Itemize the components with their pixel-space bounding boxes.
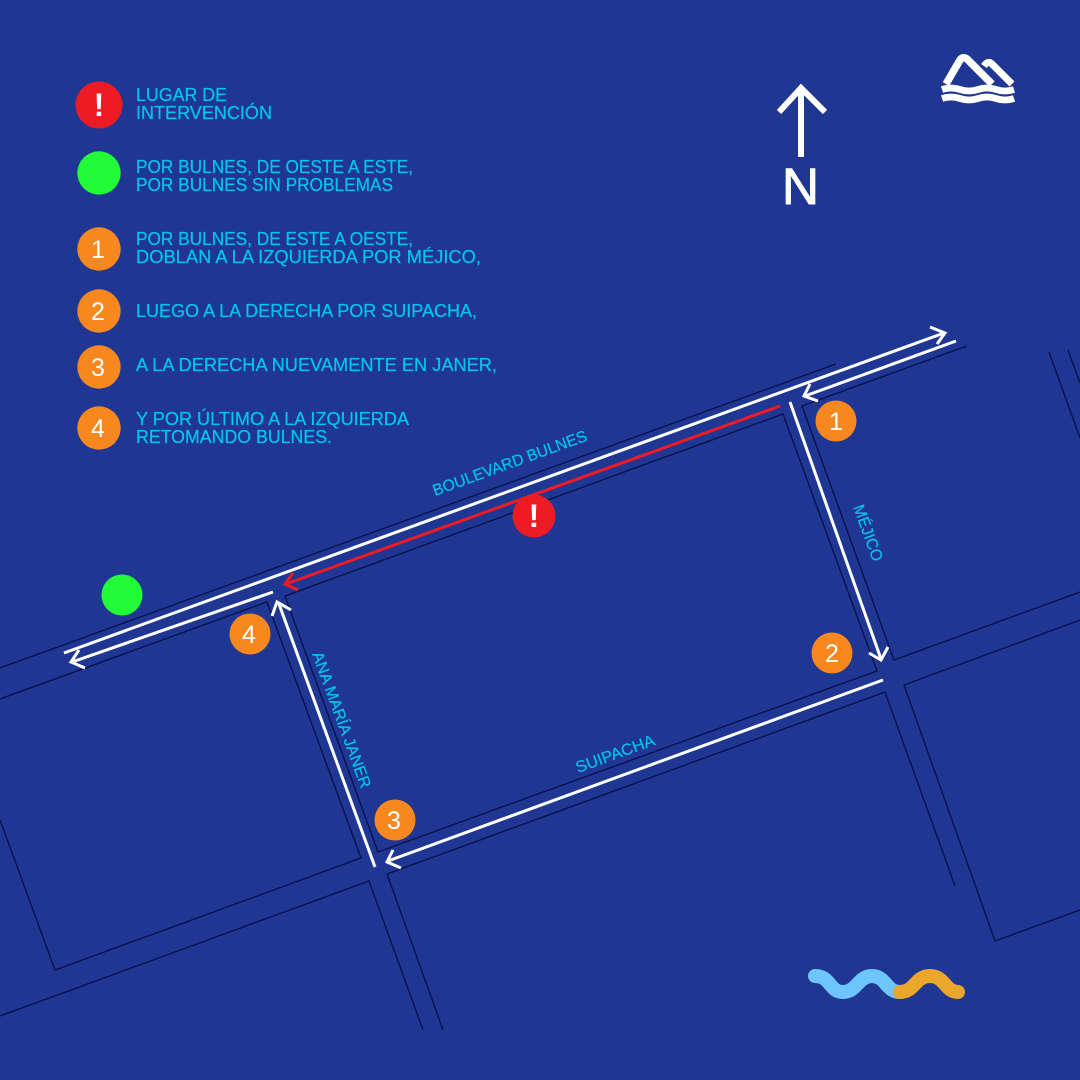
legend item: green route — [77, 151, 413, 195]
north arrow: N — [782, 158, 819, 215]
legend item: step 4 — [77, 406, 410, 450]
label: Ana María Janer: ANA MARÍA JANER — [308, 649, 375, 791]
legend item: step 1: DOBLAN A LA IZQUIERDA POR MÉJICO, — [136, 246, 481, 267]
legend item: step 1: 1 — [91, 236, 105, 264]
arrow: Bulnes west section — [71, 592, 273, 668]
legend item: intervention: ! — [94, 87, 104, 123]
legend item: step 4: Y POR ÚLTIMO A LA IZQUIERDA — [136, 408, 410, 429]
arrow: Ana María Janer — [272, 602, 375, 867]
north arrow — [779, 88, 825, 215]
legend item: step 4: RETOMANDO BULNES. — [136, 426, 332, 447]
legend item: step 2: 2 — [91, 298, 105, 326]
map marker: 2 — [812, 632, 852, 674]
legend item: step 3 — [77, 345, 497, 389]
legend item: step 3: 3 — [91, 354, 105, 382]
arrow: Suipacha — [387, 680, 883, 868]
street map outlines — [0, 346, 1080, 1030]
map marker: 3 — [374, 800, 416, 840]
map marker: 1: 1 — [829, 408, 843, 436]
legend item: intervention: INTERVENCIÓN — [136, 102, 272, 123]
map marker: 3: 3 — [387, 807, 401, 835]
legend item: intervention: LUGAR DE — [136, 84, 227, 105]
label: Boulevard Bulnes: BOULEVARD BULNES — [431, 428, 590, 500]
map marker: 1 — [816, 400, 856, 442]
arrow: Bulnes east to Méjico — [804, 341, 956, 401]
legend — [76, 82, 497, 450]
logo: mountains and waves — [942, 58, 1014, 100]
legend item: step 2 — [77, 289, 477, 333]
map marker: 2: 2 — [825, 640, 839, 668]
legend item: step 4: 4 — [91, 415, 105, 443]
map marker: intervention: ! — [529, 498, 539, 534]
map marker: intervention — [512, 494, 556, 538]
legend item: step 1: POR BULNES, DE ESTE A OESTE, — [136, 228, 413, 249]
legend item: green route: POR BULNES SIN PROBLEMAS — [136, 174, 393, 195]
arrow: intervention section — [285, 406, 780, 590]
arrow: Méjico — [790, 402, 888, 660]
legend item: intervention — [76, 82, 272, 128]
legend item: step 2: LUEGO A LA DERECHA POR SUIPACHA, — [136, 300, 477, 321]
label: Suipacha: SUIPACHA — [574, 732, 658, 777]
wave logo — [815, 976, 958, 992]
label: Méjico: MÉJICO — [849, 502, 887, 564]
map marker: 4: 4 — [242, 621, 256, 649]
legend item: step 3: A LA DERECHA NUEVAMENTE EN JANER, — [136, 354, 497, 375]
map marker: 4 — [230, 614, 270, 654]
map marker: green — [102, 574, 142, 616]
legend item: green route: POR BULNES, DE OESTE A ESTE, — [136, 156, 413, 177]
legend item: step 1 — [77, 227, 481, 271]
arrow: Bulnes west to east — [64, 327, 945, 653]
